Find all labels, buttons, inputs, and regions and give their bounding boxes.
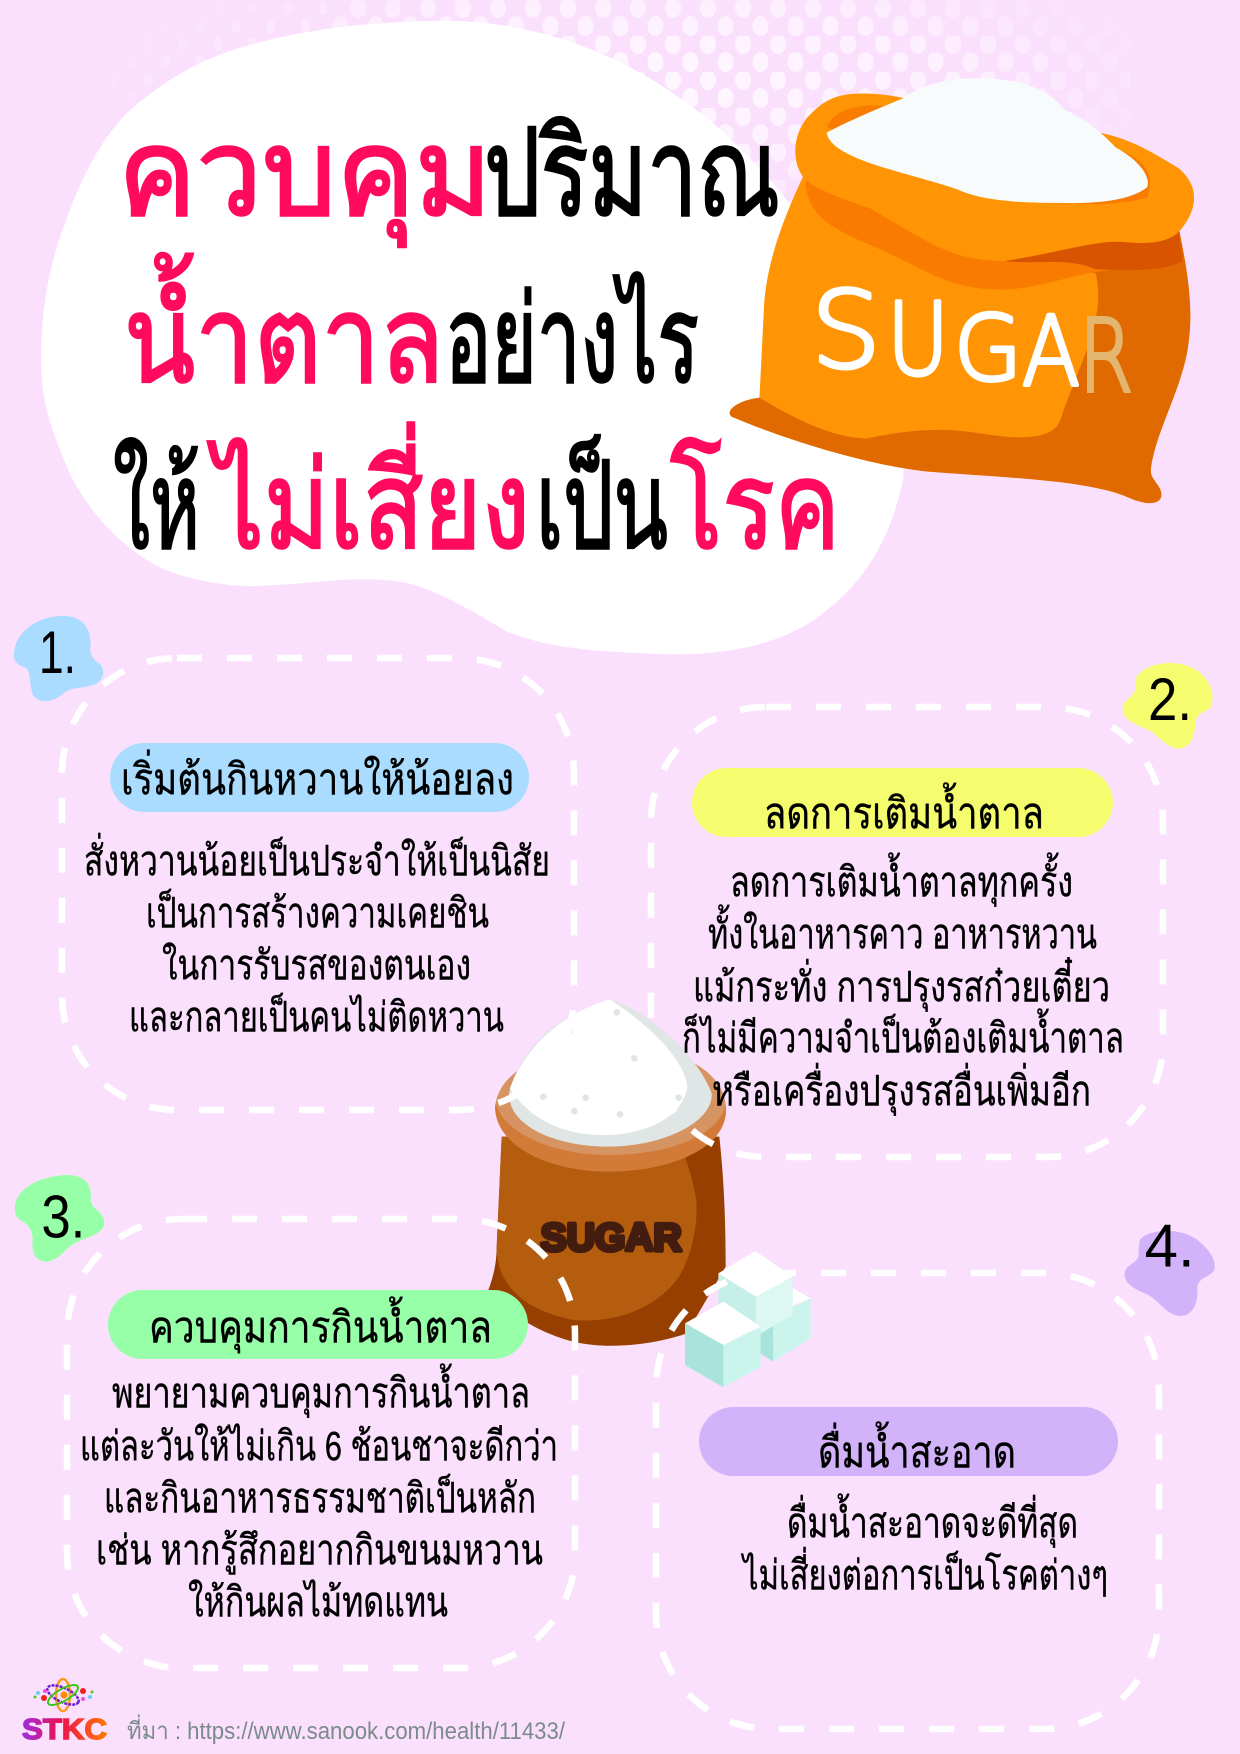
heading pill: ลดการเติมน้ำตาล [764,782,1044,838]
heading pill: ควบคุมการกินน้ำตาล [149,1296,492,1354]
body text: หรือเครื่องปรุงรสอื่นเพิ่มอีก [712,1063,1091,1116]
title line 1: ควบคุม [118,105,492,247]
sack dark fold [1005,229,1183,270]
heading pill: ดื่มน้ำสะอาด [818,1421,1016,1477]
title line 1 [118,105,780,247]
title line 3: โรค [670,438,840,574]
body text: เช่น หากรู้สึกอยากกินขนมหวาน [96,1527,543,1575]
body text: แม้กระทั่ง การปรุงรสก๋วยเตี๋ยว [693,957,1110,1012]
title [113,105,840,574]
body text [80,1363,558,1625]
sack rim [495,1050,726,1172]
body text: สั่งหวานน้อยเป็นประจำให้เป็นนิสัย [84,833,550,884]
title line 1: ปริมาณ [484,105,780,241]
number badge 2 [1123,663,1213,749]
halftone dot pattern [248,0,1062,186]
sack label: SUGAR: G [954,297,1022,402]
sack back [488,1137,726,1346]
left cube [685,1302,761,1387]
sack front [497,1137,697,1320]
body text: ดื่มน้ำสะอาดจะดีที่สุด [787,1493,1078,1548]
source credit: ที่มา : https://www.sanook.com/health/11433/ [127,1714,565,1745]
white title blob [41,21,904,654]
panel 2 dashed outline [651,707,1163,1157]
sack label: SUGAR: U [887,281,949,398]
body text [84,833,550,1040]
sugar shadow [509,999,712,1147]
panel 3 dashed outline [67,1219,575,1668]
title line 3: เป็น [536,435,668,574]
sack rim inner orange [827,105,1150,204]
logo wordmark STKC: STKC [22,1714,107,1746]
body text: แต่ละวันให้ไม่เกิน 6 ช้อนชาจะดีกว่า [80,1423,558,1469]
body text: ในการรับรสของตนเอง [162,942,471,988]
body text: และกลายเป็นคนไม่ติดหวาน [129,993,504,1040]
panel 4 content [699,1407,1118,1598]
number badge 4 [1125,1213,1215,1316]
sack label: SUGAR: R [1079,298,1133,415]
title line 2: น้ำตาล [124,252,444,408]
sack rim light [496,1050,725,1155]
body text: เป็นการสร้างความเคยชิน [146,889,489,936]
panel 2 content [682,768,1124,1116]
sack label: SUGAR [541,1215,682,1259]
title line 2 [124,252,699,408]
heading pill [692,768,1113,838]
number badge 2: 2. [1148,666,1192,733]
title line 3 [113,422,840,574]
sugar grains [540,1009,682,1118]
panel 1 content [84,743,550,1040]
sack fold shadow [805,181,1183,290]
body text: ลดการเติมน้ำตาลทุกครั้ง [730,852,1073,907]
heading pill [699,1407,1118,1477]
title line 3: ไม่เสี่ยง [207,422,530,574]
heading pill: เริ่มต้นกินหวานให้น้อยลง [121,750,514,804]
body text: และกินอาหารธรรมชาติเป็นหลัก [104,1474,536,1521]
number badge 3: 3. [41,1183,85,1250]
title line 3: ให้ [113,438,200,574]
body text: พยายามควบคุมการกินน้ำตาล [112,1363,530,1418]
panel 1 dashed outline [62,658,574,1110]
body text: ให้กินผลไม้ทดแทน [188,1579,448,1625]
sugar highlight [510,999,687,1135]
number badge 1: 1. [39,619,76,686]
heading pill [108,1290,528,1359]
icon: large sugar sack [730,78,1194,503]
icon: STKC atom logo [34,1679,94,1711]
panel 3 content [80,1290,558,1625]
number badge 4: 4. [1145,1213,1195,1280]
body text: ทั้งในอาหารคาว อาหารหวาน [708,904,1097,957]
heading pill [110,743,529,812]
sack label: SUGAR: A [1022,296,1080,408]
sack label: SUGAR: S [811,269,881,392]
right cube [740,1277,811,1362]
title line 2: อย่างไร [445,272,699,408]
top cube [718,1251,793,1336]
body text [682,852,1124,1116]
body text [741,1493,1108,1598]
number badge 1 [14,616,103,701]
body text: ไม่เสี่ยงต่อการเป็นโรคต่างๆ [741,1547,1108,1598]
sugar heap [827,78,1148,203]
sack rim [795,93,1194,261]
icon: sugar cubes [685,1251,811,1387]
sack body [730,177,1190,503]
number badge 3 [15,1175,104,1262]
icon: small sugar sack [488,999,726,1346]
sack label: SUGAR [811,269,1133,415]
panel 4 dashed outline [656,1273,1159,1729]
sack shaded side [730,227,1190,503]
